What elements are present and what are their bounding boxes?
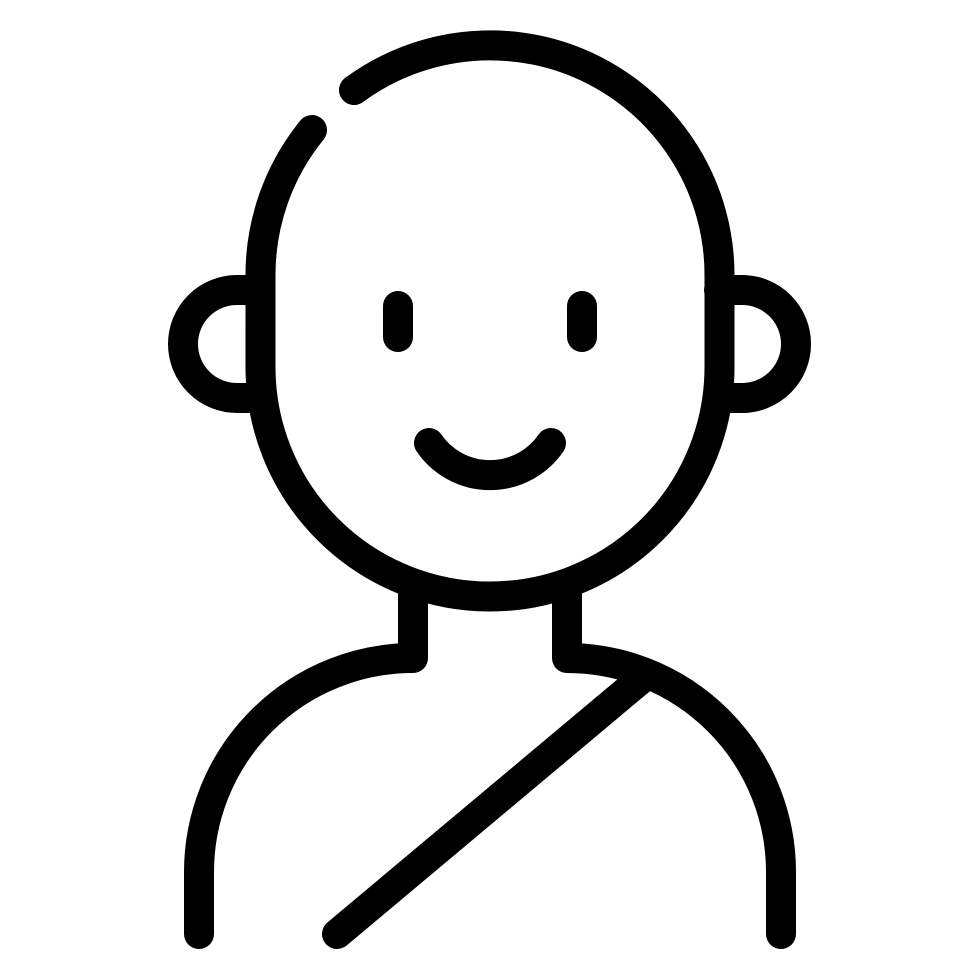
head outline [260,45,720,597]
right ear [719,290,796,398]
smile [429,443,551,475]
robe sash [337,680,640,934]
left eye [383,306,413,337]
left ear [183,290,260,398]
neck and shoulders [199,590,781,934]
right eye [567,306,597,337]
